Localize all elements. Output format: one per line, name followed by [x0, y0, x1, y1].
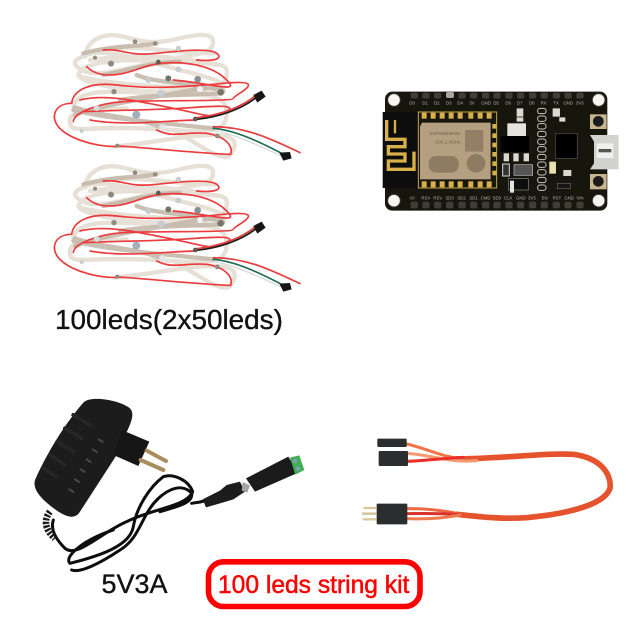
antenna: [383, 112, 420, 188]
pin labels: RX: [541, 101, 547, 106]
adapter body: [35, 399, 132, 517]
label: LED count: 100leds(2x50leds): [55, 304, 283, 335]
pin labels: 3V3: [528, 195, 536, 200]
pin labels: D1: [422, 101, 428, 106]
small components: [503, 108, 571, 193]
pin labels: CMD: [481, 195, 491, 200]
badge: kit name: 100 leds string kit: [218, 572, 410, 599]
pin labels: GND: [564, 195, 574, 200]
reset button: [590, 174, 607, 189]
pin labels: GND: [481, 101, 491, 106]
icon: upper LED string coil: [54, 35, 300, 161]
mounting holes: [388, 94, 605, 207]
pin labels: VIN: [576, 195, 584, 200]
pin labels: D7: [517, 101, 523, 106]
pin labels: [409, 101, 584, 200]
pin labels: SD0: [493, 195, 502, 200]
icon: NodeMCU controller board: ISM 2.4GHz: [435, 139, 461, 144]
pin labels: D0: [409, 101, 415, 106]
pin labels: D4: [457, 101, 463, 106]
wire bundle: [407, 444, 610, 519]
flash button: [590, 114, 607, 129]
regulator: [507, 123, 526, 137]
pin labels: SD3: [445, 195, 454, 200]
plug pins: [141, 451, 166, 470]
pin labels: GND: [563, 101, 573, 106]
pin labels: 3V3: [576, 101, 584, 106]
icon: jumper wire: [362, 439, 610, 524]
badge: kit name: [208, 562, 420, 606]
pin labels: RST: [553, 195, 562, 200]
adapter cable: [52, 476, 223, 571]
icon: NodeMCU controller board: [383, 92, 619, 211]
connector pins: [362, 508, 377, 519]
pin labels: D6: [505, 101, 511, 106]
top and bottom pin rows: [411, 92, 584, 208]
label: voltage: 5V3A: [102, 569, 168, 599]
pin labels: D5: [493, 101, 499, 106]
header pad column: [538, 108, 546, 190]
pin labels: D2: [434, 101, 440, 106]
pin labels: SD1: [469, 195, 478, 200]
pin labels: SD2: [457, 195, 466, 200]
module shield: [420, 123, 491, 179]
pin labels: A0: [409, 195, 415, 200]
USB chip: [555, 133, 577, 159]
female terminal: [246, 457, 297, 492]
connector housings: [377, 439, 408, 524]
pin labels: D3: [446, 101, 452, 106]
micro USB port: [590, 135, 619, 169]
pin labels: RSV: [421, 195, 430, 200]
pin labels: TX: [553, 101, 559, 106]
pin labels: 3V: [469, 101, 475, 106]
pin labels: CLK: [504, 195, 513, 200]
icon: lower LED string coil: [54, 166, 300, 292]
pin labels: EN: [542, 195, 548, 200]
pin labels: D8: [529, 101, 535, 106]
body ribs: [43, 415, 90, 477]
plug: [113, 430, 149, 466]
icon: NodeMCU controller board: ESP8266MOD: [430, 131, 461, 136]
pin labels: RSV: [433, 195, 442, 200]
board body: [385, 92, 607, 211]
pin labels: GND: [516, 195, 526, 200]
ESP module: [418, 112, 497, 188]
icon: power adapter with cable: [35, 399, 304, 571]
barrel connector: [203, 482, 245, 507]
